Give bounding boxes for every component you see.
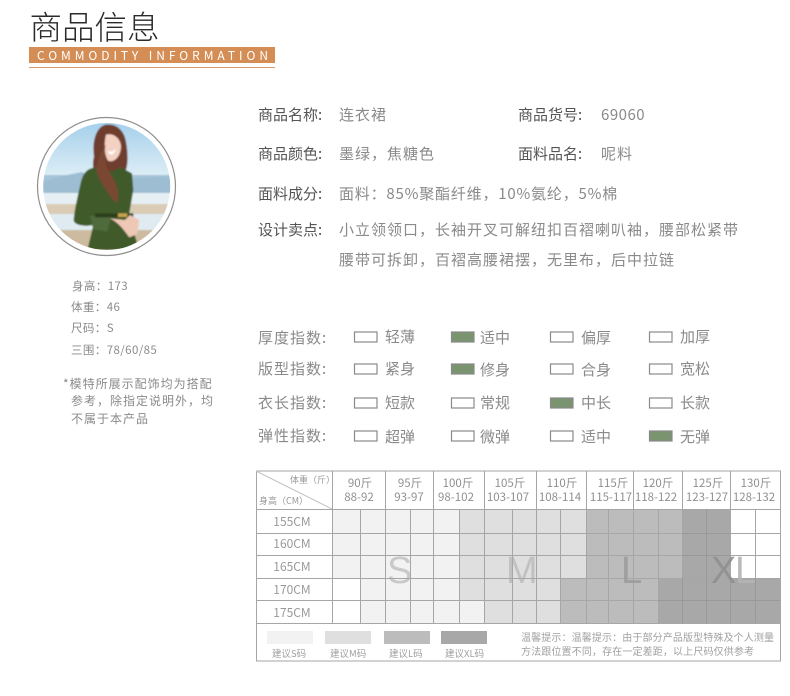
index: elasticity	[258, 425, 710, 447]
product details: 连衣裙	[339, 104, 387, 125]
size letters: X	[711, 550, 736, 592]
index: thickness: 轻薄	[385, 326, 415, 347]
title: 商品信息	[30, 2, 160, 49]
size tip	[521, 629, 774, 658]
weight headers: 95斤	[398, 475, 422, 491]
weight headers: 100斤	[443, 475, 473, 491]
size legend: 建议XL码	[445, 646, 484, 660]
model note: 不属于本产品	[71, 410, 149, 427]
weight headers: 98-102	[438, 489, 474, 505]
product details	[258, 104, 739, 270]
product details: 69060	[601, 104, 645, 125]
weight headers: 123-127	[686, 489, 728, 505]
index: elasticity: 无弹	[680, 426, 710, 447]
index: length: 中长	[581, 392, 611, 413]
index: elasticity: 弹性指数:	[258, 425, 327, 446]
belt	[95, 213, 133, 217]
model portrait	[38, 118, 176, 256]
weight headers: 128-132	[733, 489, 775, 505]
table corner labels	[259, 473, 335, 507]
model note	[63, 375, 214, 427]
size tip: 方法跟位置不同，存在一定差距，以上尺码仅供参考	[521, 643, 754, 658]
index: length: 短款	[385, 392, 415, 413]
product details: 小立领领口，长袖开叉可解纽扣百褶喇叭袖，腰部松紧带	[339, 219, 739, 240]
size tip: 温馨提示：温馨提示：由于部分产品版型特殊及个人测量	[521, 629, 774, 644]
size legend: 建议M码	[330, 646, 366, 660]
index: fit: 合身	[581, 359, 611, 380]
height labels: 165CM	[273, 558, 311, 575]
model measurements: 身高：173	[72, 278, 128, 294]
weight headers: 103-107	[487, 489, 529, 505]
face	[105, 134, 121, 161]
product details: 商品颜色:	[258, 143, 322, 164]
index: thickness: 适中	[480, 327, 510, 348]
height labels: 160CM	[273, 535, 311, 552]
table corner labels: 身高（CM）	[259, 494, 308, 507]
dress	[74, 167, 139, 250]
weight headers: 125斤	[693, 475, 723, 491]
index: length: 长款	[680, 392, 710, 413]
index: fit: 宽松	[680, 358, 710, 379]
index: fit	[258, 358, 710, 380]
weight headers: 105斤	[495, 475, 525, 491]
weight headers	[344, 475, 775, 505]
size legend: 建议S码	[272, 646, 306, 660]
index: elasticity: 超弹	[385, 426, 415, 447]
index: length: 衣长指数:	[258, 392, 327, 413]
model note: 参考，除指定说明外，均	[71, 392, 214, 409]
model note: *模特所展示配饰均为搭配	[63, 375, 213, 392]
product details: 呢料	[601, 143, 633, 164]
product details: 设计卖点:	[258, 219, 322, 240]
weight headers: 115-117	[590, 489, 632, 505]
sleeve cuff	[90, 216, 110, 232]
model measurements: 三围：78/60/85	[71, 342, 157, 358]
size letters: L	[735, 550, 756, 592]
weight headers: 130斤	[741, 475, 771, 491]
height labels	[273, 513, 311, 621]
weight headers: 93-97	[394, 489, 424, 505]
size letters	[387, 550, 756, 592]
weight headers: 90斤	[348, 475, 372, 491]
hair front	[96, 145, 118, 203]
model measurements	[71, 278, 157, 358]
index: length: 常规	[480, 392, 510, 413]
weight headers: 120斤	[643, 475, 673, 491]
height labels: 170CM	[273, 581, 311, 598]
weight headers: 110斤	[547, 475, 577, 491]
size legend	[267, 631, 487, 660]
height labels: 175CM	[273, 604, 311, 621]
index: fit: 修身	[480, 359, 510, 380]
product details: 面料品名:	[518, 143, 582, 164]
subtitle banner: COMMODITY INFORMATION	[37, 47, 268, 64]
size chart	[256, 471, 781, 661]
product details: 商品名称:	[258, 104, 322, 125]
index: thickness: 厚度指数:	[258, 327, 327, 348]
product details: 墨绿，焦糖色	[339, 143, 435, 164]
index: elasticity: 微弹	[480, 426, 510, 447]
table grid	[256, 471, 781, 661]
size letters: L	[621, 550, 642, 592]
index: thickness	[258, 326, 710, 348]
weight headers: 115斤	[598, 475, 628, 491]
height labels: 155CM	[273, 513, 311, 530]
product details: 腰带可拆卸，百褶高腰裙摆，无里布，后中拉链	[339, 249, 675, 270]
size letters: M	[506, 550, 538, 592]
model measurements: 尺码：S	[71, 320, 114, 336]
product details: 面料成分:	[258, 183, 322, 204]
size legend: 建议L码	[389, 646, 423, 660]
index: fit: 紧身	[385, 358, 415, 379]
index: elasticity: 适中	[581, 426, 611, 447]
index: thickness: 偏厚	[581, 327, 611, 348]
hair back	[92, 124, 128, 173]
weight headers: 88-92	[344, 489, 374, 505]
model measurements: 体重：46	[71, 299, 120, 315]
hand	[110, 215, 139, 237]
index: thickness: 加厚	[680, 326, 710, 347]
size letters: S	[387, 550, 412, 592]
size colour regions	[332, 509, 780, 623]
weight headers: 118-122	[635, 489, 677, 505]
weight headers: 108-114	[539, 489, 582, 505]
product details: 面料：85%聚酯纤维，10%氨纶，5%棉	[339, 183, 618, 204]
index: length	[258, 392, 710, 413]
index: fit: 版型指数:	[258, 358, 327, 379]
table corner labels: 体重（斤）	[290, 473, 335, 486]
product details: 商品货号:	[518, 104, 582, 125]
